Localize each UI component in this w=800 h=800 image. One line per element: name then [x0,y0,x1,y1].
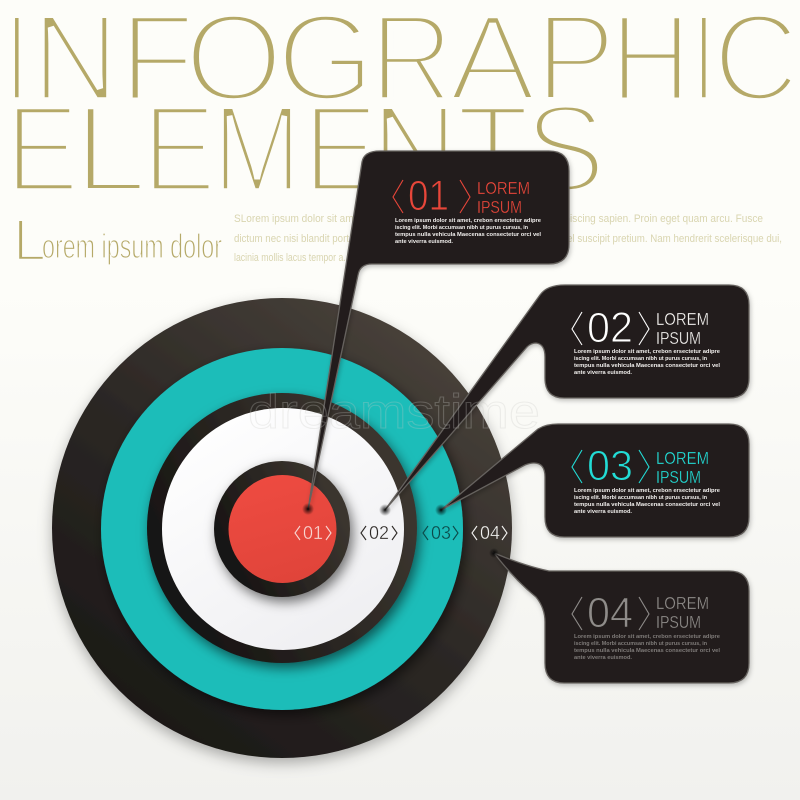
callout 01 body: iscing elit. Morbi accumsan nibh ut purus cursus, in [395,225,528,231]
callout 04 tip [489,548,499,558]
subheading [13,208,222,273]
paragraph text [234,213,782,264]
title: ELEMENTS: L [74,80,147,218]
callout 04 heading: LOREM [656,593,709,613]
title: INFOGRAPHIC [5,0,799,128]
callout 02 heading: LOREM [656,309,709,329]
callout 02 body: iscing elit. Morbi accumsan nibh ut purus cursus, in [574,356,707,362]
callout 04 bubble and pointer [494,553,749,683]
ring 02: white [162,408,404,650]
title: ELEMENTS: E [303,80,378,218]
callout 04 [489,548,749,683]
label 04 [472,523,507,543]
label 04: 04 [480,523,500,543]
title: ELEMENTS: E [142,79,216,218]
callout 04 number: 04 [587,589,633,637]
title: ELEMENTS: N [370,80,458,219]
ring: inner dark [147,393,417,663]
label 02 [361,523,397,543]
callout 02 body: ante viverra euismod. [574,370,633,376]
callout 02 number [572,304,649,352]
ring 03: teal [101,348,463,710]
callout 01 heading [477,178,530,217]
callout 03 bubble and pointer [441,424,749,537]
callout 01 number: 01 [408,172,449,220]
callout 04 number [572,589,649,637]
callout 04 body [574,634,721,661]
callout 03 body: iscing elit. Morbi accumsan nibh ut purus cursus, in [574,495,707,501]
callout 02 heading: IPSUM [656,328,701,348]
callout 01 bubble and pointer [308,151,569,510]
callout 03 body: ante viverra euismod. [574,509,633,515]
subheading: L [13,208,46,273]
callout 01 heading: IPSUM [477,197,522,217]
ring 01: red centre [228,475,336,583]
title: ELEMENTS: T [456,79,530,218]
callout 03 body [574,488,721,515]
callout 03 body: Lorem ipsum dolor sit amet, crebon ersectetur adipre [574,488,720,494]
ring labels [295,523,507,543]
subheading: orem ipsum dolor [42,228,222,266]
callout 03 heading: IPSUM [656,467,701,487]
label 01 [295,523,331,543]
callout 03 heading: LOREM [656,448,709,468]
callout 02 [379,285,749,516]
callout 04 body: Lorem ipsum dolor sit amet, crebon ersectetur adipre [574,634,720,640]
title: ELEMENTS: S [524,80,606,218]
callout 04 body: ante viverra euismod. [574,655,633,661]
callout 01 body: ante viverra euismod. [395,239,454,245]
callout 01 heading: LOREM [477,178,530,198]
ring 04: outer dark [52,298,512,758]
callout 02 number: 02 [587,304,633,352]
label 01: 01 [303,523,323,543]
callout 02 tip [379,504,391,516]
label 03 [423,523,458,543]
callout 03 number: 03 [587,442,633,490]
label 03: 03 [431,523,451,543]
callout 01 body: tempus nulla vehicula Maecenas consectetur orci vel [395,232,542,238]
title: ELEMENTS [5,79,606,219]
callout 03 body: tempus nulla vehicula Maecenas consectetur orci vel [574,502,721,508]
callout 02 body: Lorem ipsum dolor sit amet, crebon ersectetur adipre [574,349,720,355]
callout 04 body: iscing elit. Morbi accumsan nibh ut purus cursus, in [574,641,707,647]
callout 04 body: tempus nulla vehicula Maecenas consectetur orci vel [574,648,721,654]
title: ELEMENTS: E [5,79,79,218]
callout 01 number [393,172,470,220]
ring: centre dark [214,461,350,597]
callout 03 tip [435,504,447,516]
title: ELEMENTS: M [212,79,302,218]
concentric target chart [52,298,512,758]
callout 02 bubble and pointer [385,285,749,510]
callout 03 heading [656,448,709,487]
callout 03 [435,424,749,537]
label 02: 02 [369,523,389,543]
callout 01 body: Lorem ipsum dolor sit amet, crebon ersectetur adipre [395,218,541,224]
callout 04 heading [656,593,709,632]
callout 03 number [572,442,649,490]
callout 02 body: tempus nulla vehicula Maecenas consectetur orci vel [574,363,721,369]
callout 01 tip [302,503,314,515]
paragraph text: lacinia mollis lacus tempor a. P [234,252,354,264]
callout 02 heading [656,309,709,348]
callout 01 body [395,218,542,245]
watermark: dreamstime [248,386,540,439]
paragraph text: SLorem ipsum dolor sit amet, consectetur adipiscing elit sed mauris, in adipiscing sapien. Proin eget quam arcu. Fusce [234,213,763,225]
callout 02 body [574,349,721,376]
callout 01 [302,151,569,515]
callout 04 heading: IPSUM [656,612,701,632]
